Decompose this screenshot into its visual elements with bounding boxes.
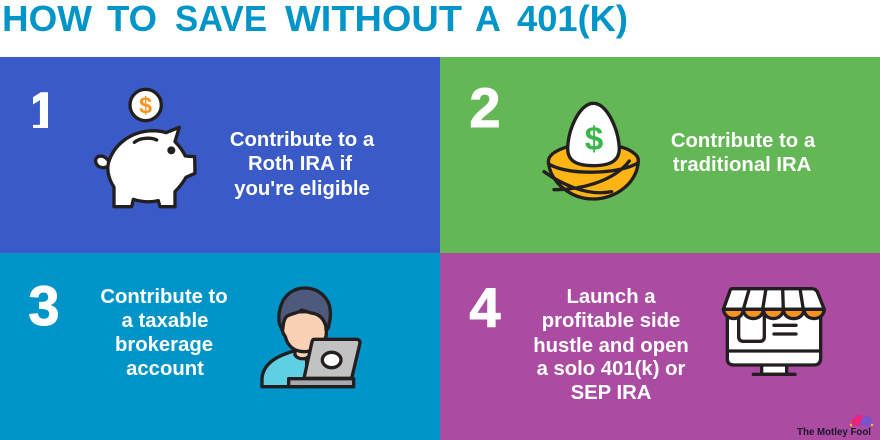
- text: step 4: Launch a: [566, 286, 656, 308]
- logo: The Motley Fool: The Motley Fool: [797, 426, 871, 438]
- icon: nest egg: $: [585, 121, 604, 158]
- icon: piggy bank with coin: $: [139, 92, 152, 118]
- panel: step 4 side hustle: [440, 253, 880, 440]
- step number 2: 2: [469, 76, 501, 139]
- text: step 2: Contribute to a: [671, 130, 816, 152]
- icon: piggy bank with coin: [96, 89, 195, 207]
- step number 4: 4: [469, 276, 501, 339]
- text: step 4: SEP IRA: [571, 382, 652, 404]
- text: step 4: hustle and open: [533, 335, 689, 357]
- icon: nest egg: [544, 103, 638, 199]
- panel: step 2 traditional IRA: [440, 57, 880, 253]
- icon: online shop on monitor: [723, 289, 824, 374]
- text: step 3: Contribute to: [100, 286, 228, 308]
- text: step 4: a solo 401(k) or: [537, 358, 685, 380]
- text: step 1: Roth IRA if: [248, 153, 352, 175]
- text: step 2: traditional IRA: [673, 154, 812, 176]
- panel: step 1 Roth IRA: [0, 57, 440, 253]
- text: step 3: brokerage: [115, 334, 213, 356]
- text: step 3: a taxable: [122, 310, 208, 332]
- panel: step 3 taxable brokerage: [0, 253, 440, 440]
- icon: jester hat: [850, 415, 873, 426]
- step number 3: 3: [28, 274, 60, 337]
- text: step 1: Contribute to a: [230, 129, 375, 151]
- text: step 3: account: [126, 358, 204, 380]
- logo: The Motley Fool: [797, 415, 873, 438]
- step number 1: 1: [27, 80, 59, 143]
- text: step 4: profitable side: [542, 310, 680, 332]
- icon: person with laptop: [262, 288, 360, 387]
- title: [2, 0, 628, 39]
- text: step 1: you're eligible: [234, 178, 370, 200]
